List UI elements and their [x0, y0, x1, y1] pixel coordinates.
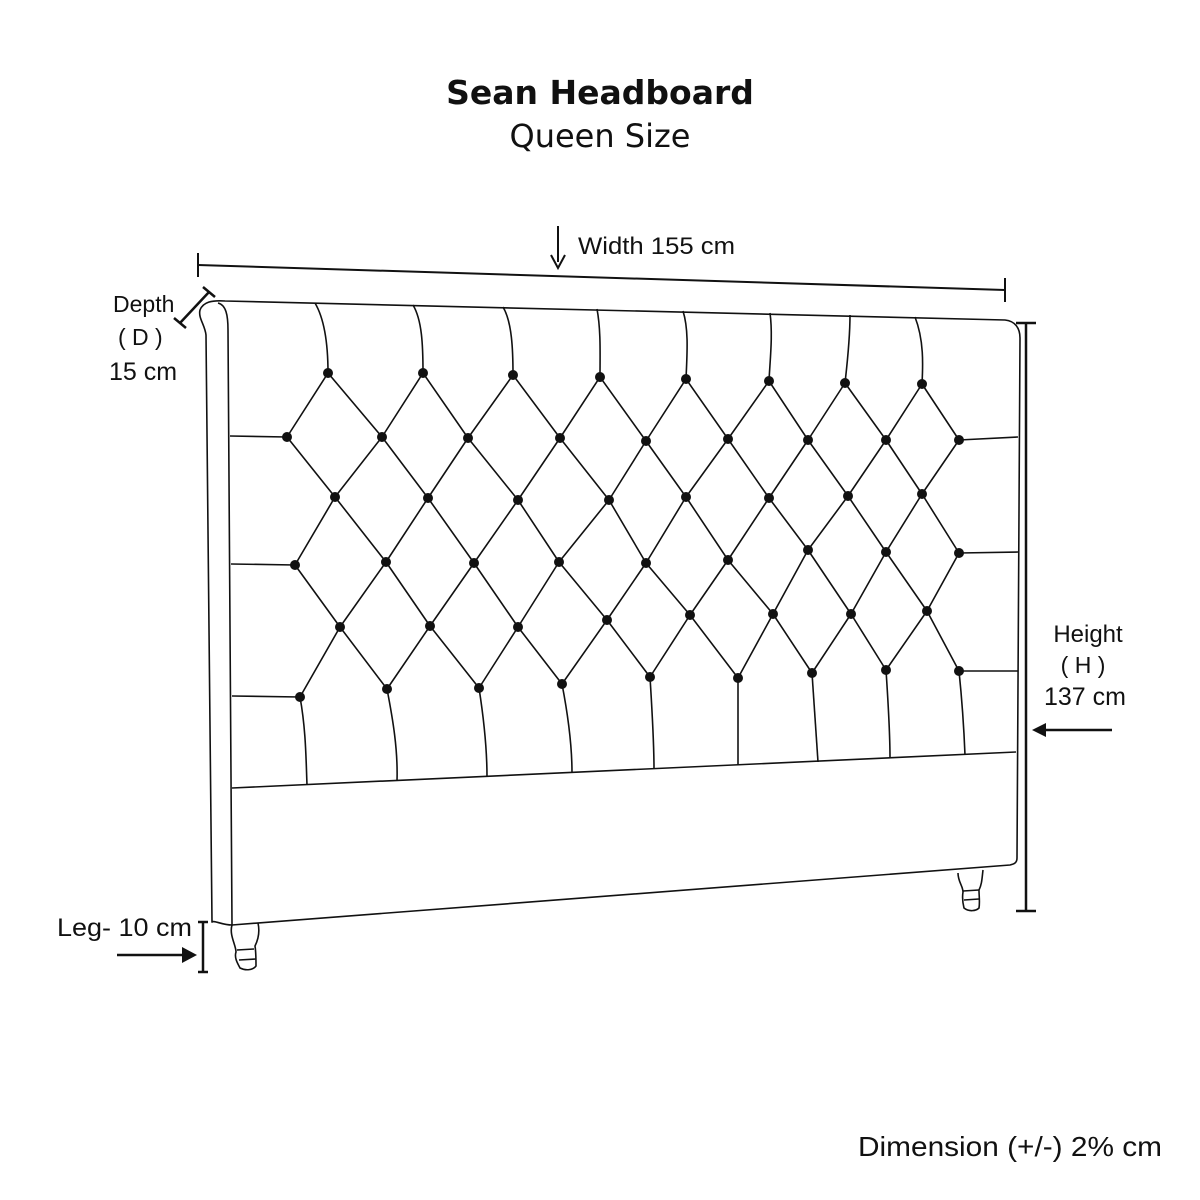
height dimension: 137 cm	[1044, 683, 1126, 711]
title: Sean Headboard	[446, 73, 754, 112]
depth label: ( D )	[118, 324, 163, 350]
depth label: Depth	[113, 291, 174, 317]
height dimension: Height	[1053, 621, 1123, 648]
tufting buttons	[282, 368, 964, 702]
depth label: 15 cm	[109, 358, 177, 386]
headboard drawing	[200, 301, 1020, 970]
leg dimension	[57, 914, 208, 972]
width dimension: Width 155 cm	[578, 233, 735, 260]
footer note: Dimension (+/-) 2% cm	[858, 1131, 1162, 1162]
depth label	[109, 287, 215, 386]
height dimension	[1016, 323, 1126, 911]
height dimension: ( H )	[1061, 652, 1105, 678]
subtitle: Queen Size	[510, 117, 690, 155]
leg dimension: Leg- 10 cm	[57, 914, 192, 942]
width dimension	[198, 226, 1005, 302]
